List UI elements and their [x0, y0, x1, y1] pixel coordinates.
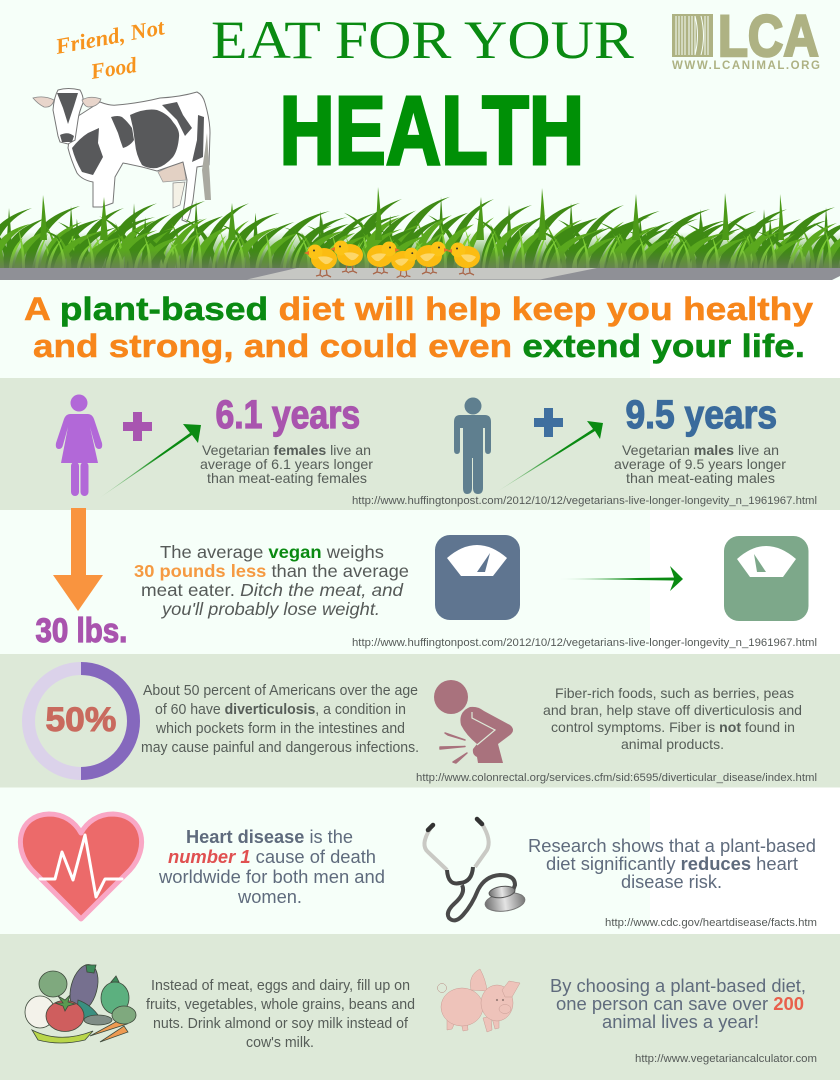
- text: lives saved: [550, 976, 806, 1032]
- text: females: average of 6.1 years longer: [200, 456, 373, 472]
- source link: http://www.cdc.gov/heartdisease/facts.htm: [605, 917, 817, 929]
- text: males: than meat-eating males: [626, 470, 775, 486]
- text: diverticulosis: which pockets form in the intestines and: [155, 721, 405, 737]
- text: what to eat: nuts. Drink almond or soy milk instead of: [153, 1016, 408, 1032]
- text: diverticulosis: About 50 percent of Americans over the age: [143, 683, 418, 699]
- arrow: down orange: [53, 508, 103, 611]
- text: fiber: [543, 685, 802, 752]
- stat: 9.5 years: 9.5 years: [626, 393, 777, 438]
- icon: heart with pulse: [20, 814, 142, 919]
- white background panel: right column of headline: [650, 280, 840, 378]
- caption: friend, not food: [52, 14, 167, 84]
- headline: [24, 291, 813, 364]
- text: males: [614, 442, 786, 486]
- text: vegan weight: you'll probably lose weight.: [161, 599, 380, 619]
- panel: longevity: [0, 378, 840, 510]
- text: heart disease: Heart disease is the: [186, 827, 353, 847]
- title: health: HEALTH: [280, 76, 584, 185]
- panel: weight: [36, 508, 817, 649]
- text: diverticulosis: of 60 have diverticulosis, a condition in: [155, 702, 406, 718]
- text: heart disease: women.: [237, 887, 302, 907]
- stat: 6.1 years: 6.1 years: [216, 391, 360, 437]
- icon: woman: [56, 394, 102, 496]
- logo: LCA: WWW.LCANIMAL.ORG: [672, 60, 820, 72]
- icon: vegetables: [25, 961, 136, 1043]
- text: fiber: animal products.: [621, 736, 724, 752]
- text: females: Vegetarian females live an: [202, 442, 371, 458]
- source link: http://www.colonrectal.org/services.cfm/sid:6595/diverticular_disease/index.html: [416, 772, 817, 784]
- text: what to eat: [146, 978, 415, 1051]
- text: vegan weight: The average vegan weighs: [160, 542, 384, 562]
- icon: light scale: [724, 536, 808, 621]
- text: vegan weight: meat eater. Ditch the meat, and: [141, 580, 404, 600]
- caption: friend, not food: Food: [88, 52, 139, 84]
- text: heart disease: worldwide for both men and: [158, 867, 385, 887]
- caption: friend, not food: Friend, Not: [52, 14, 167, 59]
- white background panel: right column of weight row: [650, 510, 840, 654]
- text: what to eat: Instead of meat, eggs and dairy, fill up on: [151, 978, 410, 994]
- illustration: grass: [0, 187, 840, 268]
- icon: plus purple: [123, 412, 152, 441]
- source link: http://www.huffingtonpost.com/2012/10/12/vegetarians-live-longer-longevity_n_1961967.html: [352, 495, 817, 507]
- icon: person in pain: [434, 680, 513, 763]
- icon: pig: [438, 969, 520, 1032]
- icon: man: [454, 398, 491, 494]
- icon: stethoscope: [424, 819, 526, 920]
- icon: cow: [33, 88, 211, 222]
- title: eat for your: EAT FOR YOUR: [211, 11, 634, 70]
- chicks: [304, 240, 480, 278]
- headline: A plant-based diet will help keep you healthy: [24, 291, 813, 327]
- text: males: Vegetarian males live an: [622, 442, 779, 458]
- text: research: disease risk.: [621, 872, 722, 892]
- white background panel: right column of heart row: [650, 787, 840, 934]
- arrow: up right purple side: [98, 424, 201, 499]
- panel: plant-based choices: [0, 934, 840, 1080]
- chart: 50 percent donut: 50%: [46, 702, 116, 739]
- text: what to eat: cow's milk.: [246, 1035, 314, 1051]
- text: lives saved: one person can save over 200: [556, 994, 804, 1014]
- logo: LCA: LCA: [718, 4, 819, 69]
- text: what to eat: fruits, vegetables, whole grains, beans and: [146, 997, 415, 1013]
- text: research: Research shows that a plant-based: [528, 836, 816, 856]
- text: heart disease: [158, 827, 385, 907]
- source link: http://www.vegetariancalculator.com: [635, 1053, 817, 1065]
- text: females: than meat-eating females: [207, 470, 367, 486]
- text: males: average of 9.5 years longer: [614, 456, 786, 472]
- text: fiber: Fiber-rich foods, such as berries, peas: [555, 685, 794, 701]
- text: lives saved: By choosing a plant-based diet,: [550, 976, 806, 996]
- text: diverticulosis: may cause painful and dangerous infections.: [141, 740, 419, 756]
- headline: and strong, and could even extend your life.: [33, 328, 805, 364]
- text: heart disease: number 1 cause of death: [168, 847, 376, 867]
- text: research: [528, 836, 816, 892]
- text: vegan weight: 30 pounds less than the average: [134, 561, 409, 581]
- panel: heart: [20, 814, 817, 929]
- icon: plus blue: [534, 408, 563, 437]
- panel: diverticulosis: [0, 654, 840, 788]
- text: research: diet significantly reduces heart: [546, 854, 798, 874]
- text: vegan weight: [134, 542, 409, 619]
- text: fiber: and bran, help stave off diverticulosis and: [543, 702, 802, 718]
- text: lives saved: animal lives a year!: [602, 1012, 759, 1032]
- text: diverticulosis: [141, 683, 419, 756]
- logo: LCA: [672, 4, 820, 72]
- road: [0, 268, 840, 280]
- arrow: to lighter scale: [557, 566, 683, 591]
- chart: 50 percent donut: [28, 668, 134, 774]
- source link: http://www.huffingtonpost.com/2012/10/12/vegetarians-live-longer-longevity_n_1961967.html: [352, 637, 817, 649]
- text: females: [200, 442, 373, 486]
- text: fiber: control symptoms. Fiber is not found in: [551, 719, 795, 735]
- arrow: up right blue side: [495, 421, 603, 493]
- icon: heavy scale: [435, 535, 520, 620]
- stat: 30 lbs: 30 lbs.: [36, 611, 127, 649]
